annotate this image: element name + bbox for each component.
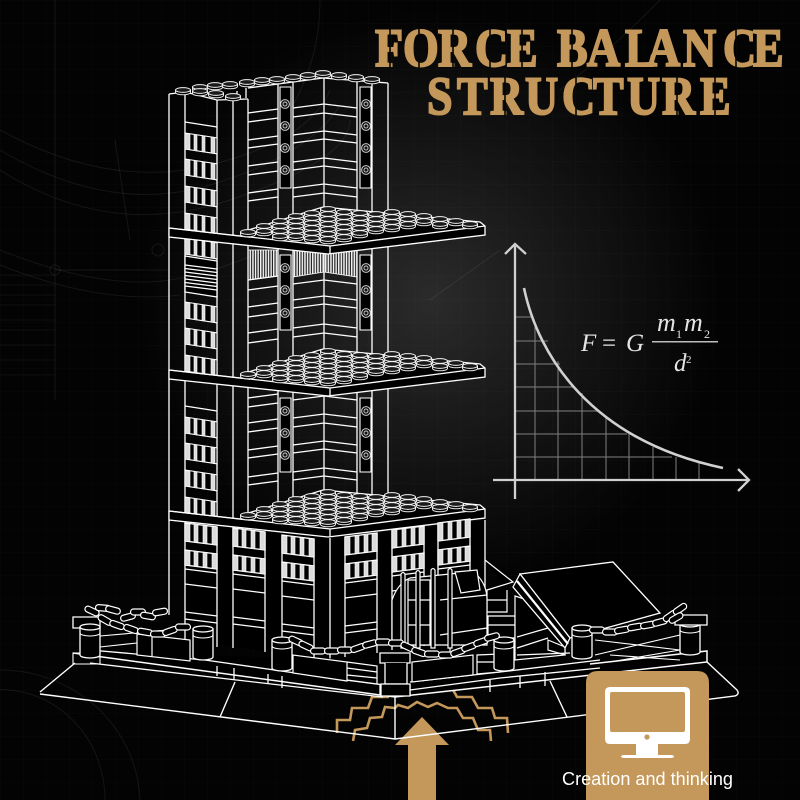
formula bbox=[580, 308, 718, 377]
formula: G bbox=[626, 330, 644, 357]
chart curve bbox=[524, 288, 723, 468]
left column windows bbox=[185, 122, 217, 518]
title bbox=[375, 18, 784, 126]
tower frame bbox=[169, 78, 388, 615]
formula: d bbox=[674, 350, 687, 377]
chart grid bbox=[515, 317, 699, 480]
formula: F bbox=[580, 330, 597, 357]
formula: 1 bbox=[676, 327, 682, 341]
chart axes bbox=[493, 244, 749, 499]
posts bbox=[73, 615, 707, 696]
badge label: Creation and thinking bbox=[562, 769, 733, 789]
formula: = bbox=[602, 330, 616, 357]
badge: creation and thinking bbox=[562, 671, 733, 800]
base platform bbox=[40, 560, 738, 739]
right wall ledges, panels and bolts bbox=[248, 87, 371, 485]
central gate bbox=[392, 568, 487, 655]
tilted book panel bbox=[520, 562, 660, 638]
formula: 2 bbox=[704, 327, 710, 341]
building tower bbox=[169, 71, 388, 615]
formula: 2 bbox=[686, 354, 692, 366]
title: FORCE BALANCE bbox=[375, 18, 784, 78]
force arrow and shock waves bbox=[337, 683, 508, 800]
floor plate 1 bbox=[169, 207, 485, 254]
right side blocks bbox=[485, 560, 570, 660]
tower top studs bbox=[176, 71, 380, 101]
plinth blocks bbox=[137, 634, 500, 684]
formula: m bbox=[657, 308, 676, 337]
title: STRUCTURE bbox=[427, 66, 731, 126]
chains bbox=[84, 602, 688, 658]
icon: monitor bbox=[605, 687, 690, 758]
formula: m bbox=[684, 308, 703, 337]
floor plate 2 bbox=[169, 349, 485, 396]
lower block bbox=[169, 490, 485, 660]
chart: inverse square curve bbox=[493, 244, 749, 499]
